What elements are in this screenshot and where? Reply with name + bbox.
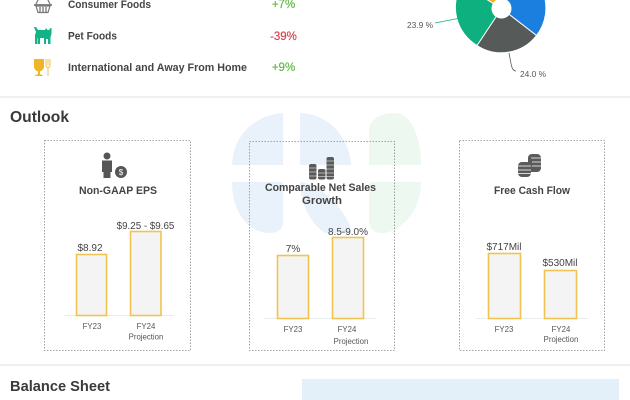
panel: Comparable Net Sales Growth <box>250 142 394 350</box>
icon: person with dollar coin: $ <box>119 168 124 177</box>
panel: balance sheet callout <box>302 379 619 400</box>
label: FY23: FY23 <box>284 325 302 334</box>
bar: FY23 <box>76 254 106 316</box>
slice: green <box>455 0 502 46</box>
watermark logo <box>232 113 421 233</box>
axis <box>64 315 174 316</box>
bar: FY23 <box>488 254 520 318</box>
label: 23.9 %: 23.9 % <box>407 20 434 30</box>
heading: Balance Sheet: Balance Sheet <box>10 378 110 395</box>
icon: goblet and fork <box>34 59 50 76</box>
label: FY24 Projection: FY24 <box>338 325 356 334</box>
panel: Free Cash Flow <box>460 140 604 350</box>
panel: Non-GAAP EPS <box>44 140 190 350</box>
value: $530Mil: $530Mil <box>542 258 578 269</box>
icon: two coin stacks <box>518 154 541 177</box>
label: Pet Foods: Pet Foods <box>68 30 117 42</box>
bar: FY24 Projection <box>544 270 576 318</box>
divider <box>0 96 630 98</box>
value: 7%: 7% <box>286 244 300 255</box>
donut hole <box>492 0 512 18</box>
donut chart: segment share <box>407 0 547 79</box>
icon: three coin stacks <box>309 157 334 180</box>
heading: Free Cash Flow: Free Cash Flow <box>494 185 570 197</box>
value: $717Mil: $717Mil <box>486 242 522 253</box>
label: FY23: FY23 <box>495 325 513 334</box>
heading: Comparable Net Sales Growth: Growth <box>302 195 342 207</box>
panel: segment growth list <box>34 0 297 76</box>
value: $9.25 - $9.65: $9.25 - $9.65 <box>117 221 175 232</box>
slice: dark gray <box>477 8 536 53</box>
heading: Non-GAAP EPS: Non-GAAP EPS <box>79 185 157 197</box>
label: FY23: FY23 <box>83 322 101 331</box>
heading: Outlook: Outlook <box>10 109 69 126</box>
label: FY24 Projection: Projection <box>334 337 368 346</box>
icon: shopping basket <box>34 0 52 12</box>
icon: cat <box>34 27 52 44</box>
value: 8.5-9.0%: 8.5-9.0% <box>328 227 368 238</box>
bar: FY23 <box>278 256 308 318</box>
label: FY24 Projection: FY24 <box>137 322 155 331</box>
value: $8.92: $8.92 <box>77 243 103 254</box>
leader line: 24.0 % <box>509 53 516 71</box>
label: FY24 Projection: Projection <box>129 332 163 342</box>
slice: orange <box>462 0 507 8</box>
bar: FY24 Projection <box>130 232 161 316</box>
label: International and Away From Home: International and Away From Home <box>68 62 247 74</box>
axis <box>264 318 376 319</box>
value: International growth: +9% <box>272 62 295 74</box>
heading: Comparable Net Sales Growth <box>265 182 376 207</box>
icon: person with dollar coin <box>102 152 127 178</box>
leader line: 23.9 % <box>435 18 458 23</box>
label: 24.0 %: 24.0 % <box>520 69 547 79</box>
axis <box>476 318 588 319</box>
label: FY24 Projection: FY24 <box>552 325 570 334</box>
bar: FY24 Projection <box>332 238 364 318</box>
heading: Comparable Net Sales Growth: Comparable Net Sales <box>265 182 376 194</box>
divider <box>0 364 630 366</box>
slice: blue <box>502 0 546 36</box>
label: FY24 Projection: Projection <box>544 335 578 344</box>
value: Pet Foods growth: -39% <box>270 31 297 43</box>
